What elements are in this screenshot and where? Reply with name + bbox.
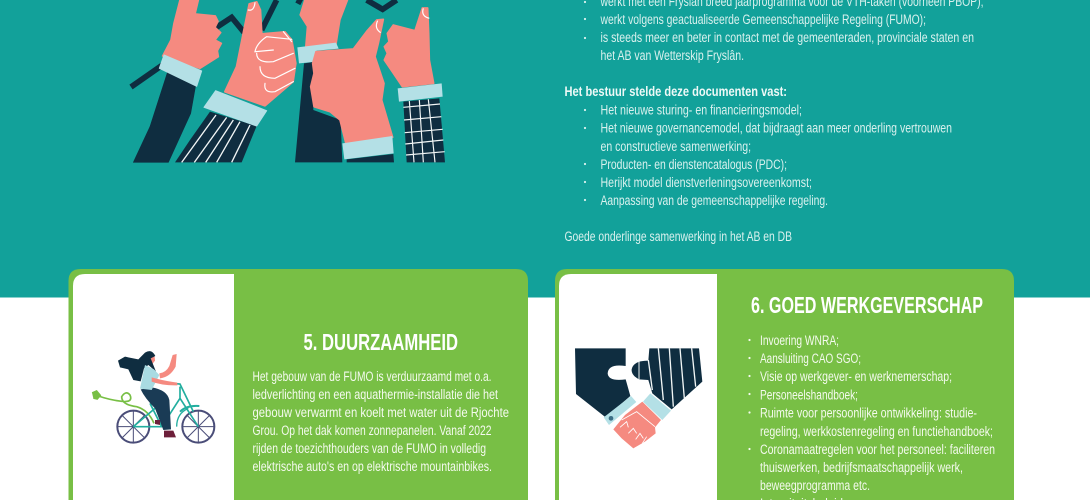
left dark sleeve <box>575 348 630 417</box>
bullet list <box>748 333 995 500</box>
bullet list: Aansluiting CAO SGO; <box>760 351 861 366</box>
body text <box>252 369 509 474</box>
teal background band <box>0 0 1090 298</box>
bullet list: Invoering WNRA; <box>760 333 839 348</box>
list bullets <box>584 1 586 201</box>
text block: FUMO bullet list: en constructieve samenwerking; <box>600 139 751 154</box>
panel: 6. Goed werkgeverschap <box>555 269 1014 500</box>
bullet list: Ruimte voor persoonlijke ontwikkeling: studie- <box>760 406 977 420</box>
text block: FUMO bullet list: Producten- en dienstencatalogus (PDC); <box>600 157 787 172</box>
heading: 6. GOED WERKGEVERSCHAP <box>751 292 983 318</box>
bullet list: regeling, werkkostenregeling en functiehandboek; <box>760 424 993 439</box>
clasped hands <box>613 402 661 448</box>
body text: elektrische auto's en op elektrische mountainbikes. <box>252 459 492 474</box>
bullet list: Personeelshandboek; <box>760 388 858 402</box>
body text: Het gebouw van de FUMO is verduurzaamd met o.a. <box>252 369 492 384</box>
hand 4 big thumb with dark sleeve <box>295 19 394 162</box>
text block: FUMO bullet list: Het bestuur stelde deze documenten vast: <box>564 84 787 99</box>
heading: 5. DUURZAAMHEID <box>304 329 458 355</box>
illustration: thumbs up hands <box>131 0 445 162</box>
bullet list: thuiswerken, bedrijfsmaatschappelijk werk, <box>760 460 963 475</box>
body text: ledverlichting en een aquathermie-installatie die het <box>252 387 498 402</box>
bullet list: Coronamaatregelen voor het personeel: faciliteren <box>760 442 995 457</box>
text block: FUMO bullet list: het AB van Wetterskip Fryslân. <box>600 48 744 63</box>
icon: puzzle handshake <box>575 348 702 448</box>
charging cord <box>92 391 154 423</box>
list bullets <box>748 339 751 450</box>
body text: gebouw verwarmt en koelt met water uit de Rjochte <box>252 405 509 420</box>
bullet list: beweegprogramma etc. <box>760 478 870 493</box>
text block: FUMO bullet list: Het nieuwe governancemodel, dat bijdraagt aan meer onderling vertrouwen <box>600 120 952 136</box>
rising graph line <box>131 0 397 87</box>
panel: 5. Duurzaamheid <box>68 269 528 500</box>
hand 2 with striped sleeve <box>175 2 296 162</box>
hand 1 with dark sleeve <box>133 0 221 162</box>
text block: FUMO bullet list: Het nieuwe sturing- en financieringsmodel; <box>600 102 802 118</box>
hand 5 with checked sleeve <box>384 8 445 162</box>
text block: FUMO bullet list <box>564 0 984 244</box>
bicycle frame <box>133 383 199 427</box>
body text: rijden de toezichthouders van de FUMO in volledig <box>252 441 486 456</box>
icon: woman on electric bike <box>92 351 214 443</box>
hand 3 top wrist and cuff <box>297 0 348 63</box>
bullet list: Visie op werkgever- en werknemerschap; <box>760 369 952 384</box>
text block: FUMO bullet list: is steeds meer en beter in contact met de gemeenteraden, provinciale staten en <box>600 30 974 45</box>
cuffs <box>604 396 636 425</box>
text block: FUMO bullet list: Aanpassing van de gemeenschappelijke regeling. <box>600 193 828 208</box>
right striped sleeve <box>632 348 702 409</box>
text block: FUMO bullet list: werkt volgens geactualiseerde Gemeenschappelijke Regeling (FUMO); <box>600 12 926 27</box>
text block: FUMO bullet list: Herijkt model dienstverleningsovereenkomst; <box>600 175 812 190</box>
rider <box>118 351 177 437</box>
body text: Grou. Op het dak komen zonnepanelen. Vanaf 2022 <box>252 423 492 438</box>
text block: FUMO bullet list: Goede onderlinge samenwerking in het AB en DB <box>564 229 792 244</box>
bicycle wheels <box>117 411 214 443</box>
